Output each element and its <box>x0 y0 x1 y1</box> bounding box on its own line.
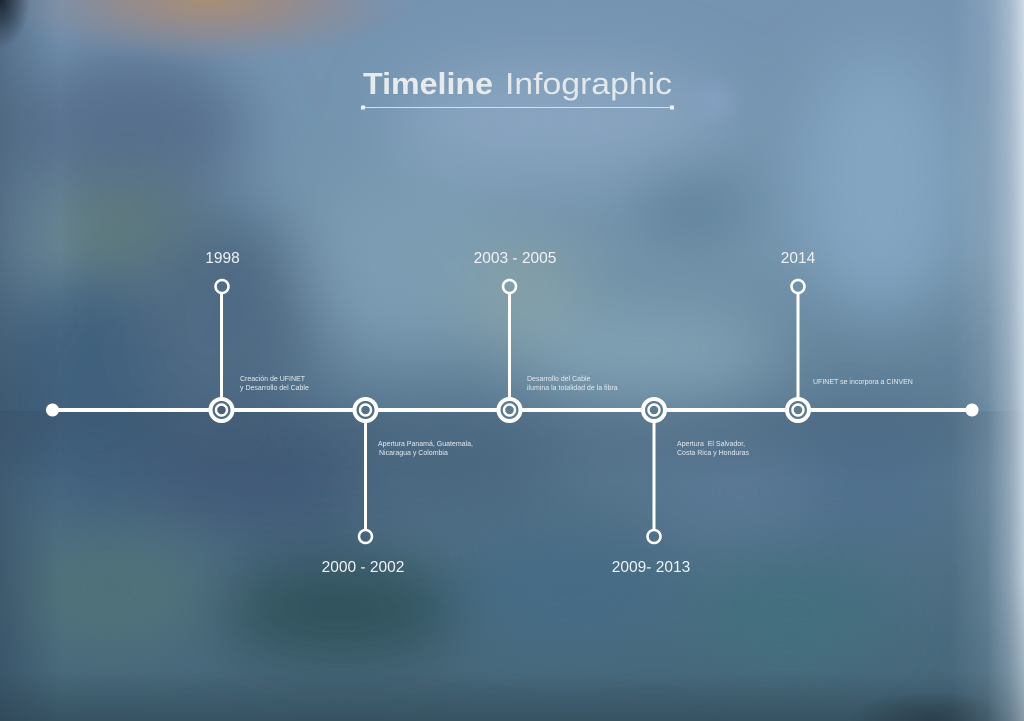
milestone 2003 - 2005: ilumina la totalidad de la fibra <box>527 385 618 392</box>
milestone 2014: 2014 <box>781 250 816 267</box>
milestone 2009- 2013: Costa Rica y Honduras <box>677 450 749 457</box>
milestone 2000 - 2002: Apertura Panamá, Guatemala, <box>378 441 473 448</box>
milestone 2014 <box>781 250 913 421</box>
shading below the axis <box>0 411 1024 481</box>
milestone 2000 - 2002: 2000 - 2002 <box>322 559 404 576</box>
milestone 2014: UFINET se incorpora a CINVEN <box>813 379 913 386</box>
milestone 2000 - 2002 <box>322 399 473 576</box>
title <box>361 66 674 110</box>
timeline main axis <box>46 404 978 416</box>
milestone 2009- 2013: 2009- 2013 <box>612 559 690 576</box>
milestone 1998 <box>205 250 309 421</box>
milestone 2003 - 2005: Desarrollo del Cable <box>527 376 591 383</box>
milestone 2009- 2013 <box>612 399 749 576</box>
milestone 1998: y Desarrollo del Cable <box>240 385 309 392</box>
title: Timeline <box>363 66 493 101</box>
milestone 2003 - 2005: 2003 - 2005 <box>474 250 556 267</box>
right edge light strip <box>964 0 1024 721</box>
title: Infographic <box>505 66 672 101</box>
milestone 2009- 2013: Apertura El Salvador, <box>677 441 745 448</box>
milestone 1998: Creación de UFINET <box>240 376 306 383</box>
milestone 2003 - 2005 <box>474 250 618 421</box>
milestone 1998: 1998 <box>205 250 240 267</box>
milestone 2000 - 2002: Nicaragua y Colombia <box>379 450 448 457</box>
